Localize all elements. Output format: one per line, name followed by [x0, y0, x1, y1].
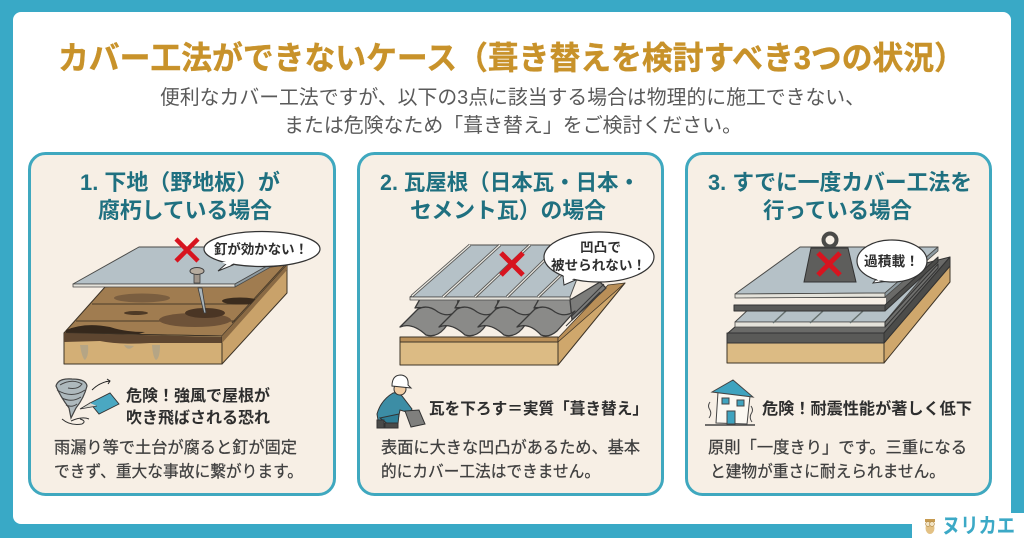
icon: red cross — [176, 239, 198, 261]
description: 原則「一度きり」です。三重になる — [708, 438, 967, 457]
panel 1 heading: 1. 下地（野地板）が — [80, 170, 280, 195]
illustration: rotten wood and metal sheet — [64, 247, 301, 364]
warning text — [126, 386, 270, 427]
speech bubble: cannot cover uneven surface: 被せられない！ — [551, 257, 646, 273]
icon: red cross — [501, 253, 523, 275]
panel 3 heading: 行っている場合 — [763, 198, 912, 223]
panel 1 heading: 腐朽している場合 — [98, 198, 272, 223]
panel: 2 tile roof — [358, 154, 662, 494]
warning text: 吹き飛ばされる恐れ — [126, 409, 270, 427]
speech bubble: cannot cover uneven surface — [544, 232, 654, 285]
warning text: 瓦を下ろす＝実質「葺き替え」 — [429, 400, 648, 418]
illustration: stacked roof layers — [727, 247, 950, 363]
description: できず、重大な事故に繋がります。 — [54, 462, 303, 481]
description: 的にカバー工法はできません。 — [381, 462, 600, 481]
description: 表面に大きな凹凸があるため、基本 — [381, 438, 640, 457]
speech bubble: overload: 過積載！ — [864, 253, 919, 269]
icon: shaking house — [705, 380, 755, 425]
speech bubble: nails do not hold: 釘が効かない！ — [214, 241, 308, 257]
description: と建物が重さに耐えられません。 — [710, 462, 945, 481]
speech bubble: nails do not hold — [204, 232, 320, 271]
warning text: 危険！耐震性能が著しく低下 — [762, 399, 972, 418]
icon: nail — [190, 268, 206, 313]
icon: worker lifting tile — [377, 375, 425, 428]
panel 1 heading — [80, 170, 280, 223]
title: カバー工法ができないケース（葺き替えを検討すべき3つの状況） — [58, 40, 965, 76]
panel 2 heading: 2. 瓦屋根（日本瓦・日本・ — [380, 170, 640, 195]
panel: 3 already covered once — [686, 154, 990, 494]
icon: tornado and flying sheet — [56, 379, 119, 424]
roof tiles front row — [400, 307, 575, 336]
panel 3 heading: 3. すでに一度カバー工法を — [708, 170, 972, 195]
panel 2 heading — [380, 170, 640, 223]
speech bubble: overload — [857, 240, 927, 283]
icon: owl mascot — [925, 519, 935, 534]
panel 3 heading — [708, 170, 972, 223]
roof tiles back row — [415, 282, 606, 320]
description — [708, 438, 967, 481]
subtitle text: 便利なカバー工法ですが、以下の3点に該当する場合は物理的に施工できない、 — [160, 86, 865, 109]
subtitle text — [160, 86, 865, 137]
subtitle text: または危険なため「葺き替え」をご検討ください。 — [284, 114, 742, 137]
description — [381, 438, 640, 481]
panel 2 heading: セメント瓦）の場合 — [410, 198, 606, 223]
speech bubble: cannot cover uneven surface: 凹凸で — [580, 240, 621, 255]
description — [54, 438, 303, 481]
description: 雨漏り等で土台が腐ると釘が固定 — [54, 438, 297, 457]
illustration: metal sheet over roof tiles — [400, 245, 625, 365]
logo: ヌリカエ — [942, 515, 1015, 538]
panel: 1 rotten substrate — [30, 154, 334, 494]
icon: weight with red cross — [804, 234, 856, 282]
warning text: 危険！強風で屋根が — [126, 386, 270, 405]
